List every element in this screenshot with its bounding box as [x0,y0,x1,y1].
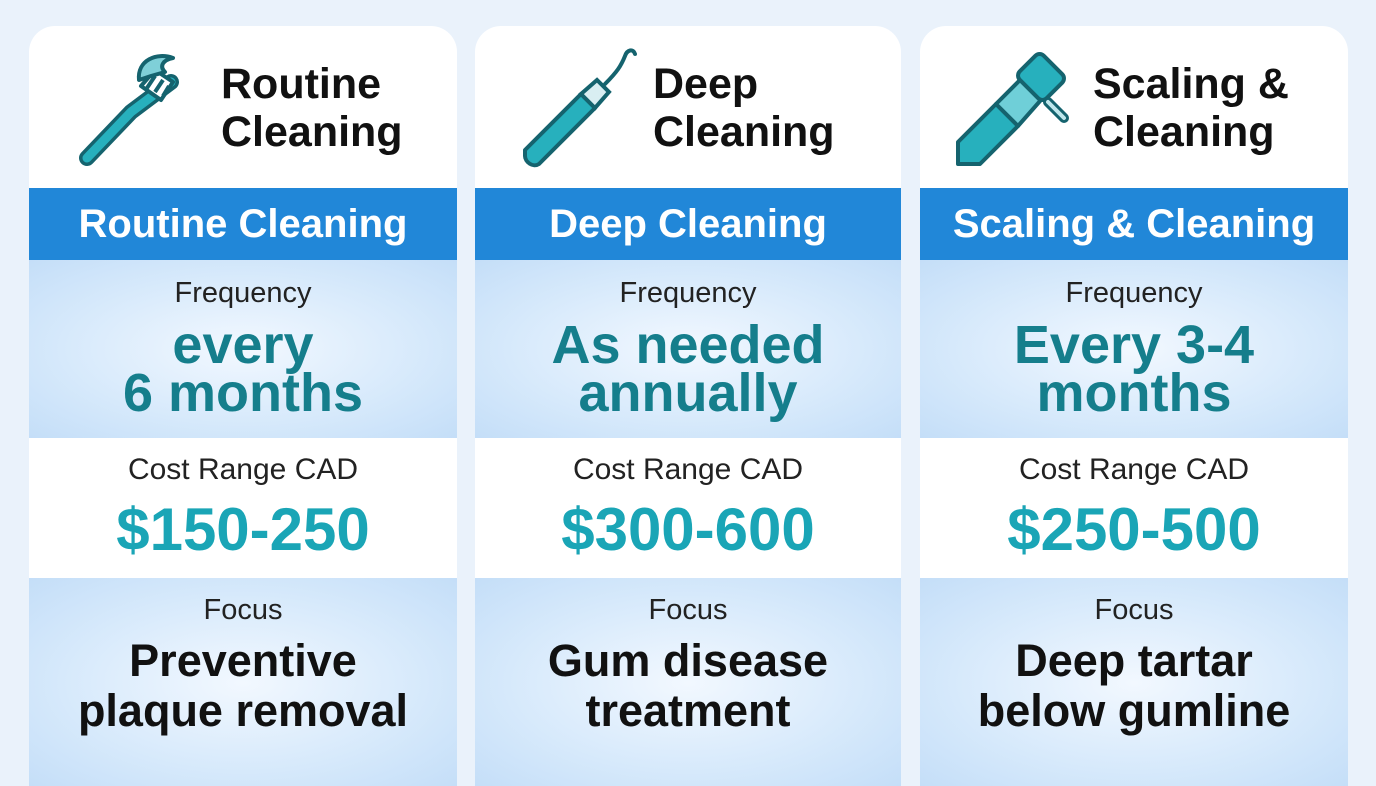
frequency block: Frequency [619,277,756,309]
band label: Deep Cleaning [549,202,827,246]
focus block: Focus [204,594,282,626]
cost block: $300-600 [561,496,815,563]
title: Deep [653,60,758,108]
frequency block [29,260,457,438]
band label: Routine Cleaning [79,202,407,246]
band label [29,188,457,260]
icon: toothbrush [79,54,179,166]
title: Cleaning [653,108,835,156]
focus block: Focus [648,594,727,626]
title [653,60,835,156]
frequency block: annually [578,363,798,423]
frequency block [920,260,1348,438]
focus block [475,578,901,786]
band label: Scaling & Cleaning [953,202,1315,246]
focus block [29,578,457,786]
cost block: $150-250 [116,496,370,563]
cost block [475,438,901,578]
frequency block: Frequency [174,277,312,309]
frequency block [475,260,901,438]
focus block [920,578,1348,786]
band label [920,188,1348,260]
cost block [920,438,1348,578]
focus block: Preventive [129,635,357,686]
title: Cleaning [1093,108,1275,156]
cost block: Cost Range CAD [1019,453,1249,486]
focus block: Gum disease [548,635,828,686]
header: scaling [956,52,1289,166]
focus block: Deep tartar [1015,635,1253,686]
frequency block: 6 months [123,363,363,423]
band label [475,188,901,260]
cost block: Cost Range CAD [573,453,803,486]
panel: scaling and cleaning [920,26,1348,786]
frequency block: Frequency [1065,277,1202,309]
frequency block: Every 3-4 [1014,315,1254,375]
title [221,60,403,156]
focus block: plaque removal [78,685,408,736]
frequency block: As needed [551,315,825,375]
cost block: $250-500 [1007,496,1261,563]
frequency block: months [1036,363,1232,423]
header: routine cleaning [79,54,403,166]
title: Routine [221,60,381,108]
cost block: Cost Range CAD [128,453,358,486]
title [1093,60,1289,156]
title: Cleaning [221,108,403,156]
focus block: below gumline [978,685,1290,736]
cost block [29,438,457,578]
focus block: Focus [1094,594,1173,626]
focus block: treatment [585,685,791,736]
panel: routine cleaning [29,26,457,786]
panel: deep cleaning [475,26,901,786]
title: Scaling & [1093,60,1289,108]
header: deep cleaning [523,48,835,168]
icon: dental handpiece [956,52,1069,166]
frequency block: every [172,315,314,375]
icon: dental scaler [523,48,638,168]
